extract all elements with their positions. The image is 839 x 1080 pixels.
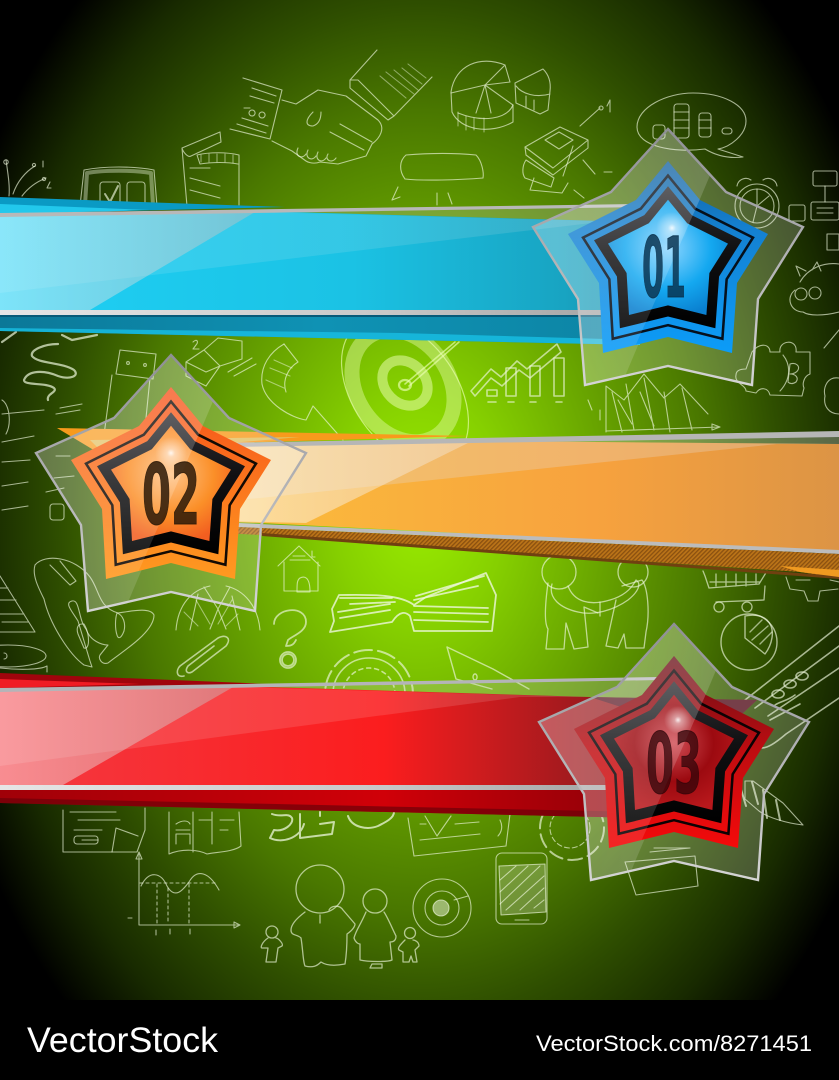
glare [0, 212, 255, 310]
doodle: mountain chart [588, 374, 720, 432]
top rim [170, 431, 839, 448]
brand name: VectorStock [27, 1021, 219, 1060]
star badge 02: orange: 02 [142, 446, 200, 544]
top rim [0, 677, 660, 692]
banner 2: orange [57, 428, 839, 579]
top sliver [0, 673, 270, 689]
main glass panel [0, 686, 757, 785]
top sliver [0, 197, 285, 214]
doodle: paper plane [447, 647, 529, 689]
doodle: curved arrow [262, 344, 343, 440]
doodle: best list [182, 132, 239, 206]
top sliver [57, 428, 470, 452]
bottom rim [0, 785, 640, 790]
doodle: cog [325, 650, 413, 738]
doodle: checkbox tablet [80, 167, 157, 206]
doodle: speech bubble with coins [637, 93, 746, 158]
footer bar [0, 1000, 839, 1080]
doodle: cubes [186, 338, 256, 386]
star badge 03: red [534, 623, 809, 883]
banner 3: red [0, 673, 757, 818]
doodle: handshake [230, 50, 432, 164]
doodle: arrows top left [4, 160, 51, 196]
bottom rim [170, 520, 839, 554]
doodle: certificate [408, 814, 510, 856]
doodle: coffee cup [413, 879, 471, 937]
image url: VectorStock.com/8271451 [536, 1031, 812, 1056]
doodle: wave graph [128, 852, 240, 935]
doodle: document [63, 808, 145, 852]
doodle: shopping cart [703, 571, 767, 612]
glass wedge above panel [235, 678, 660, 700]
doodle: 3D SEO letters [270, 812, 394, 840]
banner 1: blue [0, 197, 640, 345]
coloured star [564, 653, 774, 853]
underside hatch [170, 524, 839, 578]
main glass panel [0, 211, 640, 310]
doodle: puzzle pieces [736, 330, 839, 414]
doodle: phone under star [625, 848, 698, 895]
top rim [0, 204, 640, 217]
coloured star [558, 158, 768, 358]
doodle: left-edge notes [2, 400, 82, 520]
doodle: question mark [274, 610, 306, 668]
coloured star [61, 384, 271, 584]
doodle: stack of books [523, 100, 612, 198]
underside band [0, 790, 640, 818]
doodle: family figures [261, 865, 419, 968]
doodle: piggy bank [790, 262, 839, 315]
glass wedge above panel [470, 435, 839, 445]
doodle: open book [330, 573, 496, 632]
doodle: two people shaking [542, 555, 648, 649]
doodle: gear bottom [540, 796, 604, 860]
glass wedge above panel [255, 205, 640, 224]
star badge 01: blue [528, 128, 803, 388]
doodle: paper clip [177, 636, 228, 676]
doodle: USB stick [104, 350, 156, 438]
underside band [0, 315, 640, 345]
glare [0, 686, 235, 785]
doodle: right-edge boxes [786, 577, 839, 601]
doodle: striped pencil tip [740, 781, 803, 825]
glass star [528, 128, 803, 388]
doodle: computer mouse [34, 558, 154, 667]
main glass panel [170, 441, 839, 552]
doodle: man in suit [176, 586, 260, 630]
star badge 02: orange [31, 354, 306, 614]
doodle: tablet [496, 853, 547, 924]
doodle: rounded button with arrows [392, 154, 483, 205]
doodle: pyramid [0, 576, 35, 632]
doodle: pie chart [451, 61, 550, 132]
doodle: org chart [789, 171, 839, 250]
doodle: pie dial [721, 614, 777, 670]
doodle: pen and calculator [740, 626, 839, 748]
bottom rim [0, 310, 640, 315]
doodle: magazine [169, 812, 241, 854]
star badge 01: blue: 01 [642, 219, 686, 317]
doodle: disk [0, 645, 47, 672]
star badge 03: red: 03 [646, 715, 702, 813]
glass star [534, 623, 809, 883]
doodle: house [278, 546, 320, 592]
doodle: target with arrow [315, 295, 495, 489]
glare [170, 441, 472, 523]
doodle: alarm clock [735, 178, 779, 228]
doodle: squiggle line [2, 332, 97, 400]
doodle: growth bar chart [471, 344, 564, 402]
glass star [31, 354, 306, 614]
